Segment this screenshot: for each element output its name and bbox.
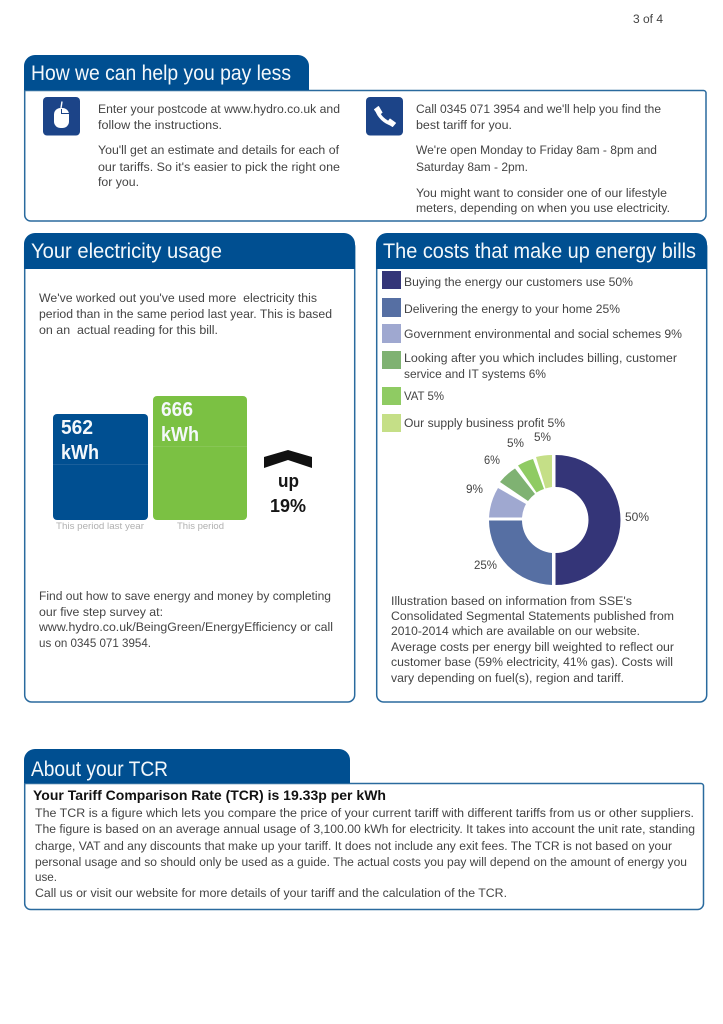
heading: your electricity usage [24, 233, 355, 269]
panel: your electricity usage [24, 233, 355, 702]
panel: about your TCR [24, 749, 704, 910]
text: illustration note: Consolidated Segmental Statements published from [391, 609, 674, 623]
text: website instructions: our tariffs. So it's easier to pick the right one [98, 160, 340, 174]
legend: Government environmental and social schemes 9% [404, 327, 682, 341]
icon: computer mouse [43, 97, 80, 136]
text: illustration note: Average costs per energy bill weighted to reflect our [391, 640, 674, 654]
donut chart: 6% [484, 453, 500, 467]
panel: how we can help you pay less [24, 55, 706, 221]
bar: this period: This period [177, 521, 224, 532]
text: five step survey: Find out how to save energy and money by completing [39, 589, 331, 603]
heading: costs [376, 233, 707, 269]
legend: Buying the energy our customers use 50% [404, 275, 633, 289]
text: TCR explanation: The TCR is a figure which lets you compare the price of your current tariff with different tariffs from us or other suppliers. [35, 806, 694, 820]
text: illustration note: vary depending on fuel(s), region and tariff. [391, 671, 624, 685]
arrow: up 19%: 19% [270, 496, 306, 516]
heading: how we can help [24, 55, 309, 91]
text: phone help: Saturday 8am - 2pm. [416, 160, 528, 174]
text: five step survey: www.hydro.co.uk/BeingGreen/EnergyEfficiency or call [38, 620, 333, 634]
text: usage summary: We've worked out you've used more electricity this [39, 291, 317, 305]
text: website instructions: for you. [98, 175, 139, 189]
text: illustration note [391, 594, 674, 685]
heading: about your TCR: About your TCR [31, 758, 168, 781]
donut chart: 5% [534, 430, 551, 444]
donut chart: 25% [474, 558, 497, 572]
heading: costs: The costs that make up energy bills [383, 240, 696, 263]
text: usage summary: period than in the same period last year. This is based [39, 307, 332, 321]
text: TCR explanation [35, 806, 695, 900]
heading: how we can help: How we can help you pay less [31, 62, 291, 85]
text: phone help: best tariff for you. [416, 118, 512, 132]
arrow: up 19% [264, 450, 312, 516]
text: five step survey [38, 589, 333, 650]
text: website instructions [98, 102, 340, 189]
heading: about your TCR [24, 749, 350, 784]
text: five step survey: us on 0345 071 3954. [39, 636, 151, 650]
text: illustration note: Illustration based on information from SSE's [391, 594, 632, 608]
donut chart [466, 430, 649, 585]
panel: the costs that make up energy bills [376, 233, 707, 702]
text: website instructions: follow the instructions. [98, 118, 222, 132]
text: phone help: We're open Monday to Friday 8am - 8pm and [416, 143, 657, 157]
bar: this period last year [53, 414, 148, 532]
bar: this period last year: 562 [61, 417, 93, 439]
donut chart: 9% [466, 482, 483, 496]
text: TCR explanation: The figure is based on an average annual usage of 3,100.00 kWh for electricity. It takes into account the unit rate, standing [35, 822, 695, 836]
text: usage summary: on an actual reading for this bill. [39, 323, 218, 337]
legend: Our supply business profit 5% [404, 416, 565, 430]
text: website instructions: Enter your postcode at www.hydro.co.uk and [98, 102, 340, 116]
bar: this period [153, 396, 247, 532]
legend: service and IT systems 6% [404, 367, 546, 381]
bar: this period: 666 [161, 399, 193, 421]
heading: your electricity usage: Your electricity usage [31, 240, 222, 263]
bar chart: usage comparison [53, 396, 312, 532]
icon: telephone [366, 97, 403, 136]
text: website instructions: You'll get an estimate and details for each of [98, 143, 340, 157]
bar: this period: kWh [161, 424, 199, 446]
bar: this period last year: This period last year [56, 521, 144, 532]
arrow: up 19%: up [278, 471, 299, 491]
text: phone help [416, 102, 670, 215]
text: usage summary [39, 291, 332, 337]
text: TCR explanation: charge, VAT and any discounts that make up your tariff. It does not include any exit fees. The TCR is not based on your [35, 839, 672, 853]
text: five step survey: our five step survey at: [39, 605, 163, 619]
text: phone help: meters, depending on when you use electricity. [416, 201, 670, 215]
text: phone help: Call 0345 071 3954 and we'll help you find the [416, 102, 661, 116]
bar: this period last year: kWh [61, 442, 99, 464]
legend: VAT 5% [404, 389, 444, 403]
legend: Delivering the energy to your home 25% [404, 302, 620, 316]
text: phone help: You might want to consider one of our lifestyle [416, 186, 667, 200]
donut chart: 50% [625, 510, 649, 524]
legend: Looking after you which includes billing, customer [404, 351, 677, 365]
text: illustration note: customer base (59% electricity, 41% gas). Costs will [391, 655, 673, 669]
donut chart: 5% [507, 436, 524, 450]
text: illustration note: 2010-2014 which are available on our website. [391, 624, 640, 638]
legend [382, 271, 682, 432]
text: TCR explanation: use. [35, 870, 57, 884]
text: TCR explanation: Call us or visit our website for more details of your tariff and the calculation of the TCR. [35, 886, 507, 900]
subheading: TCR rate: Your Tariff Comparison Rate (TCR) is 19.33p per kWh [33, 787, 386, 803]
page number: 3 of 4 [633, 12, 663, 26]
text: TCR explanation: personal usage and so should only be used as a guide. The actual costs you pay will depend on the amount of energy you [35, 855, 687, 869]
